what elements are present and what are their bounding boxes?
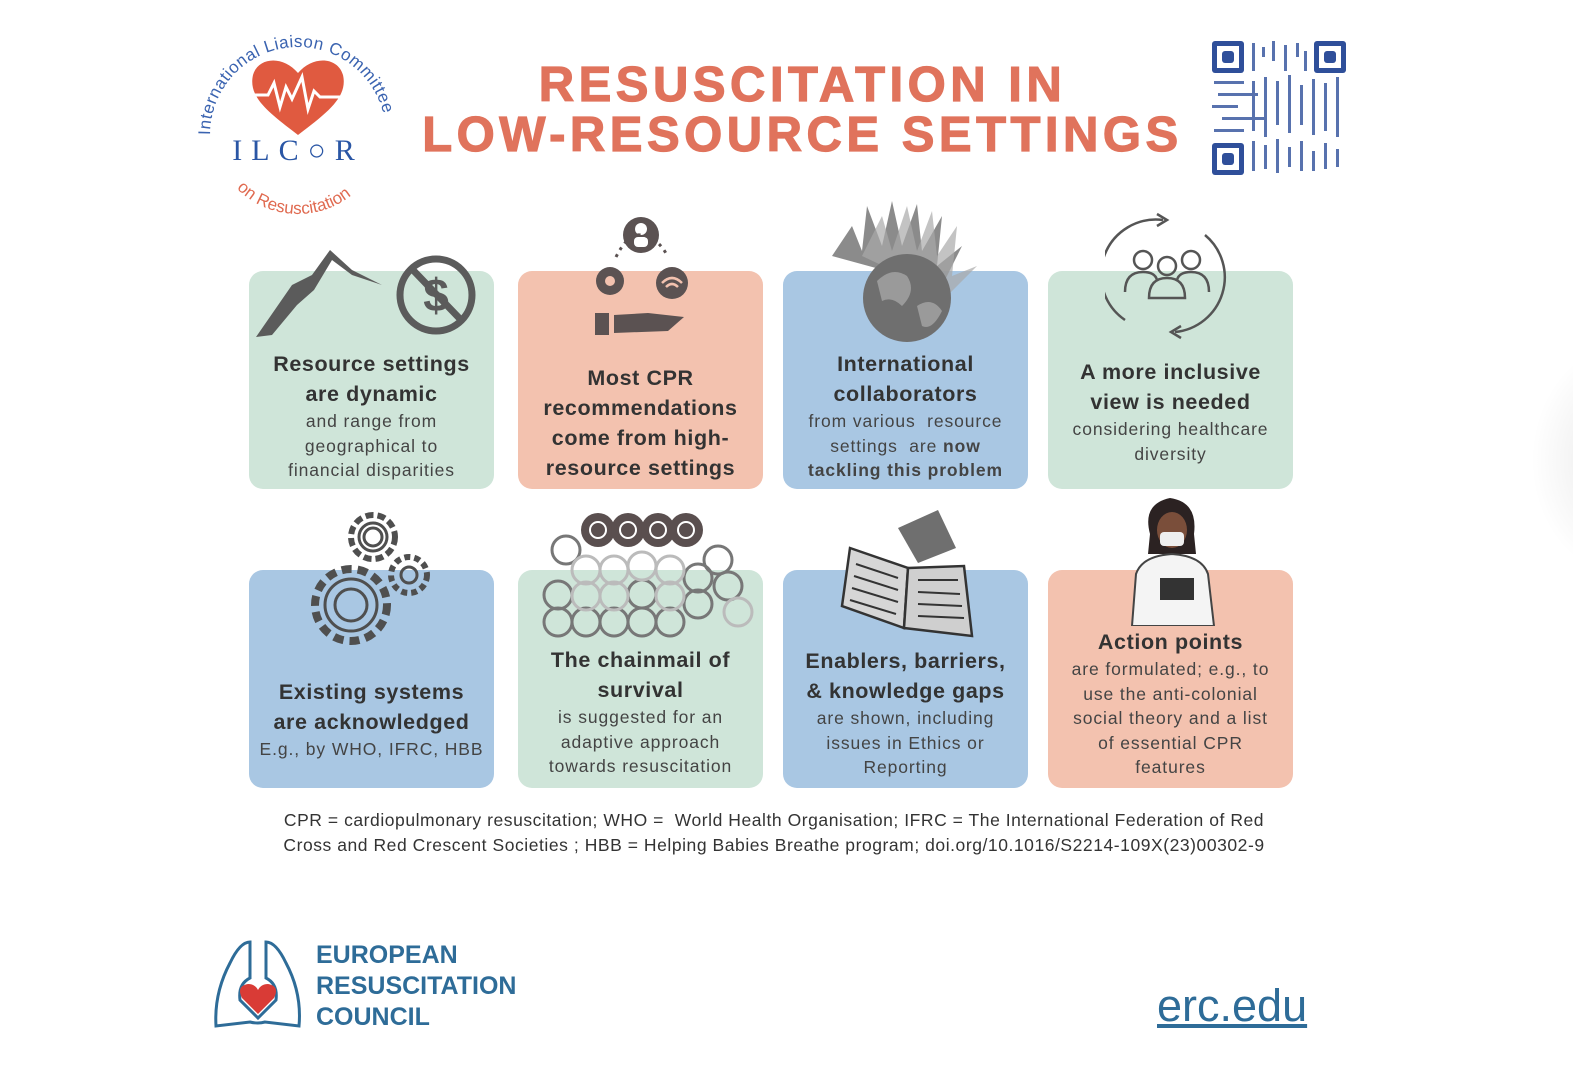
icon: people cycle (1105, 212, 1226, 340)
text: card 3: settings are now (830, 436, 981, 456)
icon: doctor (1131, 498, 1215, 626)
background shadow right edge (1530, 340, 1573, 580)
text: card 1: Resource settings (273, 352, 470, 376)
footnote (283, 810, 1265, 855)
text: card 2: come from high- (552, 426, 729, 450)
text: card 2: resource settings (546, 456, 735, 480)
logo: ILCOR: International Liaison Committee (198, 34, 392, 134)
text: card 5 (260, 680, 483, 759)
text: card 8: social theory and a list (1073, 708, 1268, 728)
text: card 7: Reporting (864, 757, 947, 777)
text: card 7: Enablers, barriers, (805, 649, 1006, 673)
card 8: action points (1048, 570, 1293, 788)
text: card 4 (1073, 360, 1268, 464)
text: card 5: E.g., by WHO, IFRC, HBB (260, 739, 483, 759)
text: card 7 (805, 649, 1006, 777)
text: card 8: use the anti-colonial (1083, 684, 1258, 704)
text: card 7: are shown, including (817, 708, 994, 728)
icon: gears (311, 512, 430, 645)
text: card 5: Existing systems (279, 680, 464, 704)
text: card 3: from various resource (809, 411, 1002, 431)
logo: ILCOR: on Resuscitation (238, 184, 350, 214)
text: card 4: view is needed (1090, 390, 1251, 414)
text: card 8 (1072, 630, 1269, 777)
footnote: Cross and Red Crescent Societies ; HBB = Helping Babies Breathe program; doi.org/10.1016/S2214-109X(23)00302-9 (283, 835, 1265, 855)
card 4: inclusive view (1048, 271, 1293, 489)
icon: person gear wifi hand (595, 217, 688, 335)
card 7: enablers (783, 570, 1028, 788)
title (422, 58, 1183, 162)
text: card 4: A more inclusive (1080, 360, 1261, 384)
QR code (1212, 41, 1346, 175)
text: card 3: collaborators (833, 382, 978, 406)
text: card 7: issues in Ethics or (826, 732, 985, 752)
logo: ERC (214, 940, 516, 1031)
link: erc.edu: erc.edu (1157, 980, 1307, 1031)
text: card 2 (543, 366, 738, 480)
text: card 3 (808, 352, 1003, 480)
text: card 7: & knowledge gaps (806, 679, 1005, 703)
card 5: existing systems (249, 570, 494, 788)
text: card 3: International (837, 352, 974, 376)
text: card 8: of essential CPR (1098, 732, 1243, 752)
card 3: international collaborators (783, 271, 1028, 489)
text: card 4: considering healthcare (1073, 419, 1268, 439)
title: RESUSCITATION IN (539, 58, 1066, 112)
text: card 3: tackling this problem (808, 460, 1003, 480)
icon: mountain and no-dollar: $ (423, 269, 449, 321)
title: LOW-RESOURCE SETTINGS (422, 108, 1183, 162)
text: card 6: adaptive approach (561, 732, 720, 752)
logo: ERC: RESUSCITATION (316, 972, 516, 1000)
text: card 8: features (1135, 757, 1206, 777)
text: card 2: recommendations (543, 396, 738, 420)
text: card 2: Most CPR (587, 366, 694, 390)
icon: open book (840, 510, 974, 638)
logo: ILCOR: ILC○R (232, 134, 364, 167)
text: card 1: and range from (306, 411, 437, 431)
icon: hands and globe (832, 201, 977, 342)
card 6: chainmail (518, 570, 763, 788)
text: card 6: survival (597, 678, 684, 702)
logo: ERC: EUROPEAN (316, 941, 458, 969)
card 1: resource settings (249, 271, 494, 489)
text: card 1 (273, 352, 470, 480)
icon: chainmail rings (542, 513, 754, 638)
text: card 1: geographical to (305, 436, 438, 456)
text: card 8: are formulated; e.g., to (1072, 659, 1269, 679)
text: card 6: is suggested for an (558, 707, 723, 727)
logo: ERC: COUNCIL (316, 1003, 430, 1031)
text: card 6: The chainmail of (551, 648, 730, 672)
footnote: CPR = cardiopulmonary resuscitation; WHO = World Health Organisation; IFRC = The International Federation of Red (284, 810, 1264, 830)
text: card 4: diversity (1134, 444, 1207, 464)
icon: mountain and no-dollar (256, 250, 476, 337)
card 2: most CPR recommendations (518, 271, 763, 489)
text: card 5: are acknowledged (273, 710, 470, 734)
text: card 1: are dynamic (305, 382, 438, 406)
logo: ILCOR (198, 34, 392, 214)
text: card 6: towards resuscitation (549, 756, 732, 776)
text: card 8: Action points (1098, 630, 1243, 654)
text: card 1: financial disparities (288, 460, 455, 480)
text: card 6 (549, 648, 732, 776)
